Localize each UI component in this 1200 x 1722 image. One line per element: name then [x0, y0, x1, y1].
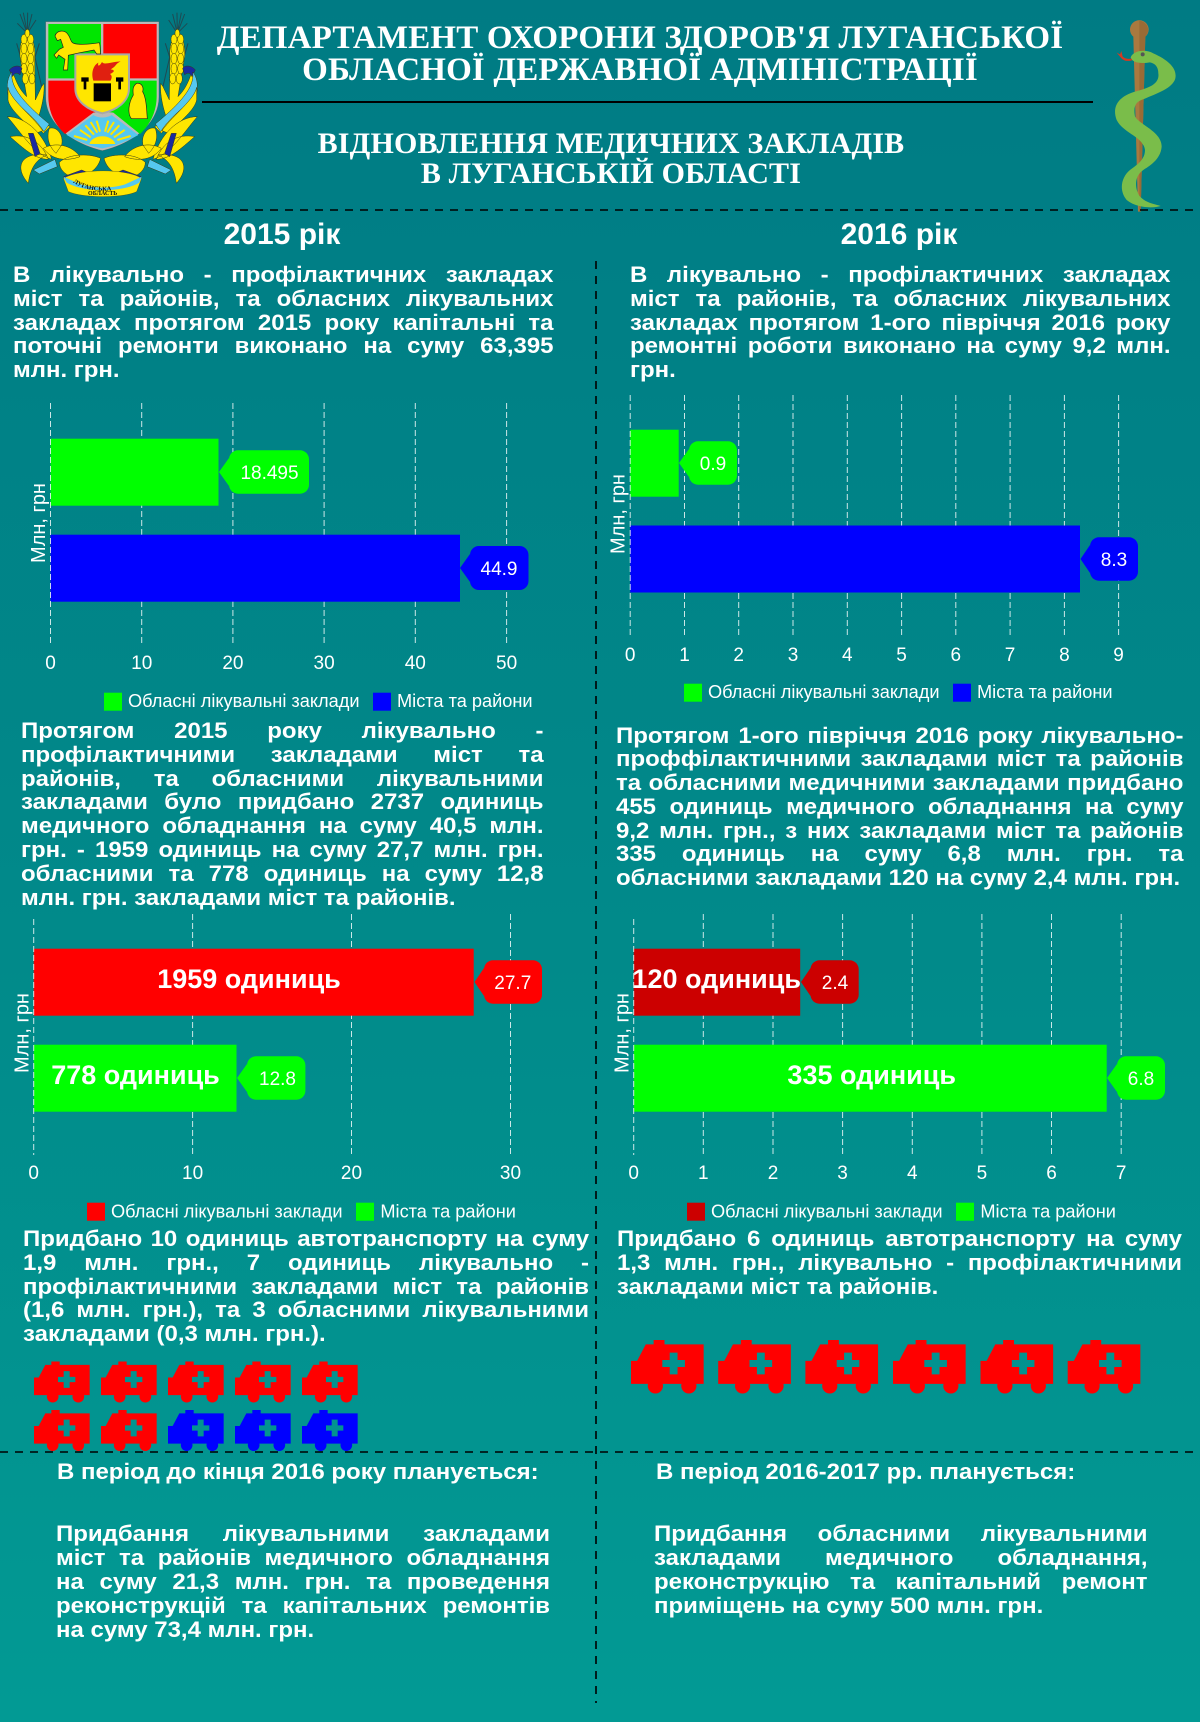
bar chart: repairs 2016: 7	[1005, 645, 1015, 666]
bar chart: repairs 2016: 8	[1059, 645, 1070, 666]
coat of arms	[6, 12, 198, 197]
subtitle	[318, 127, 904, 190]
bar chart: equipment 2016: 120 одиниць	[632, 964, 801, 994]
text: repairs 2015	[12, 262, 554, 382]
miner figure	[129, 83, 147, 119]
value callout 44.9: 44.9	[481, 559, 517, 580]
bar chart: repairs 2015: 0	[45, 653, 56, 674]
icons: 10 ambulances 2015	[34, 1362, 358, 1451]
value callout 12.8: 12.8	[259, 1069, 296, 1090]
bar chart: repairs 2015: 50	[496, 653, 517, 674]
bar chart: repairs 2015: 20	[222, 653, 243, 674]
value callout 44.9	[460, 546, 528, 590]
bar chart: equipment 2015: 778 одиниць	[51, 1060, 220, 1090]
legend	[104, 691, 533, 711]
bar chart: equipment 2016: 335 одиниць	[787, 1060, 956, 1090]
legend	[687, 1202, 1116, 1222]
title	[217, 20, 1063, 88]
shield	[46, 22, 159, 151]
text: equipment 2015: закладами було придбано 2737 одиниць	[21, 789, 544, 814]
text: equipment 2016: обласними закладами 120 на суму 2,4 млн. грн.	[616, 865, 1180, 890]
bar chart: repairs 2016: 3	[788, 645, 798, 666]
bar chart: equipment 2016: 4	[907, 1163, 918, 1184]
value callout 27.7	[474, 960, 542, 1004]
text: plans left: Придбання лікувальними закладами	[56, 1521, 549, 1546]
text: repairs 2016: ремонтні роботи виконано на суму 9,2 млн.	[630, 333, 1170, 358]
text: plans left: на суму 21,3 млн. грн. та проведення	[56, 1569, 549, 1594]
text: repairs 2016: міст та районів, та обласних лікувальних	[630, 286, 1170, 311]
text: repairs 2016: закладах протягом 1-ого півріччя 2016 року	[630, 310, 1170, 335]
text: repairs 2015: поточні ремонти виконано на суму 63,395	[12, 333, 553, 358]
bar chart: repairs 2016: 0	[625, 645, 635, 666]
text: plans right: реконструкцію та капітальний ремонт	[654, 1569, 1147, 1594]
legend: Обласні лікувальні заклади	[711, 1202, 943, 1222]
bar chart: equipment 2016: Млн, грн	[612, 993, 634, 1073]
divider: header	[0, 209, 1200, 211]
text: equipment 2016: проффілактичними закладами міст та районів	[616, 746, 1183, 771]
text: equipment 2015: млн. грн. закладами міст та районів.	[21, 885, 456, 910]
value callout 2.4: 2.4	[822, 973, 849, 994]
legend: Обласні лікувальні заклади	[111, 1202, 343, 1222]
text: repairs 2015: закладах протягом 2015 року капітальні та	[12, 310, 553, 335]
legend: Міста та райони	[980, 1202, 1116, 1222]
text: equipment 2015: Протягом 2015 року лікувально -	[21, 718, 544, 743]
text: equipment 2015: профілактичними закладами міст та	[21, 742, 544, 767]
bar chart: repairs 2015	[28, 403, 533, 711]
text: vehicles 2016: 1,3 млн. грн., лікувально - профілактичними	[617, 1250, 1182, 1275]
text: plans left	[56, 1521, 550, 1642]
title: ДЕПАРТАМЕНТ ОХОРОНИ ЗДОРОВ'Я ЛУГАНСЬКОЇ	[217, 20, 1063, 56]
value callout 8.3: 8.3	[1101, 550, 1127, 571]
bar chart: equipment 2015: 20	[341, 1163, 362, 1184]
text: plans right: приміщень на суму 500 млн. грн.	[654, 1593, 1043, 1618]
text: repairs 2015: В лікувально - профілактичних закладах	[12, 262, 553, 287]
text: equipment 2016: 455 одиниць медичного обладнання на суму	[616, 794, 1183, 819]
bar chart: repairs 2015: 40	[405, 653, 426, 674]
value callout 0.9: 0.9	[700, 454, 726, 475]
text: plans left: міст та районів медичного обладнання	[56, 1545, 549, 1570]
text: plans right	[654, 1521, 1147, 1618]
text: vehicles 2016: Придбано 6 одиниць автотранспорту на суму	[617, 1226, 1182, 1251]
header rule	[202, 101, 1093, 103]
coat of arms: ОБЛАСТЬ	[88, 191, 117, 197]
coat of arms: ЛУГАНСЬКА	[73, 179, 112, 191]
divider: vertical	[595, 261, 597, 1703]
text: equipment 2015: районів, та обласними лікувальними	[21, 766, 544, 791]
bar chart: repairs 2016	[608, 395, 1138, 702]
text: vehicles 2015: (1,6 млн. грн.), та 3 обласними лікувальними	[23, 1297, 589, 1322]
bar chart: equipment 2015: 10	[182, 1163, 203, 1184]
legend: Міста та райони	[397, 691, 533, 711]
bar chart: equipment 2015: 30	[500, 1163, 521, 1184]
icons: 6 ambulances 2016	[631, 1340, 1140, 1394]
legend	[87, 1202, 516, 1222]
text: vehicles 2015: Придбано 10 одиниць автотранспорту на суму	[23, 1226, 589, 1251]
value callout 18.495: 18.495	[240, 463, 299, 484]
text: vehicles 2016: закладами міст та районів.	[617, 1274, 938, 1299]
heading: plans left: В період до кінця 2016 року планується:	[56, 1459, 538, 1484]
text: vehicles 2015: 1,9 млн. грн., 7 одиниць лікувально -	[23, 1250, 589, 1275]
text: equipment 2016: 9,2 млн. грн., з них закладами міст та районів	[616, 818, 1183, 843]
icon: rod of Asclepius	[1115, 20, 1176, 212]
bar chart: repairs 2016: Млн, грн	[608, 474, 630, 554]
bar chart: repairs 2015: 30	[314, 653, 335, 674]
text: repairs 2015: міст та районів, та обласних лікувальних	[12, 286, 553, 311]
subtitle: ВІДНОВЛЕННЯ МЕДИЧНИХ ЗАКЛАДІВ	[318, 127, 904, 160]
divider: lower section	[0, 1451, 1200, 1453]
bar chart: equipment 2016: 1	[698, 1163, 709, 1184]
value callout 8.3	[1080, 537, 1138, 581]
bar chart: equipment 2016: 0	[628, 1163, 639, 1184]
heading: plans right: В період 2016-2017 рр. планується:	[656, 1459, 1075, 1484]
legend: Обласні лікувальні заклади	[708, 682, 940, 702]
value callout 12.8	[237, 1056, 305, 1100]
bar chart: repairs 2016: 6	[951, 645, 961, 666]
bar chart: equipment 2016: 2	[768, 1163, 778, 1184]
text: plans right: Придбання обласними лікувальними	[654, 1521, 1147, 1546]
value callout 2.4	[801, 960, 859, 1004]
heading: 2016: 2016 рік	[841, 218, 958, 251]
text: equipment 2015	[21, 718, 544, 910]
text: repairs 2016: грн.	[630, 357, 675, 382]
horse	[54, 31, 101, 70]
legend: Міста та райони	[977, 682, 1113, 702]
text: vehicles 2015	[23, 1226, 589, 1346]
bar chart: equipment 2016: 3	[837, 1163, 848, 1184]
left wheat and ribbon decoration	[7, 13, 101, 183]
title: ОБЛАСНОЇ ДЕРЖАВНОЇ АДМІНІСТРАЦІЇ	[302, 52, 978, 88]
text: equipment 2016: Протягом 1-ого півріччя 2016 року лікувально-	[616, 722, 1183, 748]
bar chart: equipment 2016: 7	[1116, 1163, 1126, 1184]
subtitle: В ЛУГАНСЬКІЙ ОБЛАСТІ	[421, 157, 801, 190]
value callout 6.8: 6.8	[1128, 1069, 1154, 1090]
bar chart: equipment 2016: 5	[977, 1163, 987, 1184]
bar chart: equipment 2015: 1959 одиниць	[157, 964, 341, 994]
bar chart: repairs 2016: 9	[1113, 645, 1124, 666]
text: plans right: закладами медичного обладнання,	[654, 1545, 1147, 1570]
bar chart: repairs 2016: 2	[733, 645, 744, 666]
text: equipment 2015: грн. - 1959 одиниць на суму 27,7 млн. грн.	[21, 837, 544, 862]
inner shield	[75, 54, 129, 113]
bar chart: repairs 2016: 1	[679, 645, 690, 666]
value callout 6.8	[1107, 1056, 1165, 1100]
text: repairs 2016	[630, 262, 1170, 382]
legend: Міста та райони	[380, 1202, 516, 1222]
legend	[684, 682, 1113, 702]
text: vehicles 2016	[617, 1226, 1182, 1299]
text: equipment 2015: медичного обладнання на суму 40,5 млн.	[21, 813, 544, 838]
text: plans left: на суму 73,4 млн. грн.	[56, 1617, 314, 1642]
bar chart: repairs 2015: Млн, грн	[28, 483, 50, 563]
legend: Обласні лікувальні заклади	[128, 691, 360, 711]
text: vehicles 2015: закладами (0,3 млн. грн.).	[23, 1321, 326, 1346]
text: equipment 2015: обласними та 778 одиниць на суму 12,8	[21, 861, 544, 886]
text: vehicles 2015: профілактичними закладами міст та районів	[23, 1274, 589, 1299]
text: repairs 2015: млн. грн.	[12, 357, 119, 382]
bar chart: equipment 2015: 0	[28, 1163, 39, 1184]
bar chart: repairs 2016: 4	[842, 645, 853, 666]
text: repairs 2016: В лікувально - профілактичних закладах	[630, 262, 1170, 287]
value callout 27.7: 27.7	[494, 973, 531, 994]
bar chart: repairs 2015: 10	[131, 653, 152, 674]
bar chart: equipment 2015	[12, 914, 542, 1222]
bar chart: equipment 2015: Млн, грн	[12, 993, 34, 1073]
text: plans left: реконструкцій та капітальних ремонтів	[56, 1593, 549, 1618]
bar chart: equipment 2016: 6	[1046, 1163, 1057, 1184]
value callout 0.9	[679, 441, 737, 485]
heading: 2015: 2015 рік	[224, 218, 341, 251]
bar chart: repairs 2016: 5	[896, 645, 907, 666]
bar chart: equipment 2016	[612, 914, 1165, 1222]
region name ribbon	[63, 171, 142, 197]
text: equipment 2016: 335 одиниць на суму 6,8 млн. грн. та	[616, 841, 1183, 866]
text: equipment 2016: та обласними медичними закладами придбано	[616, 770, 1183, 795]
value callout 18.495	[219, 450, 309, 494]
text: equipment 2016	[616, 722, 1184, 890]
